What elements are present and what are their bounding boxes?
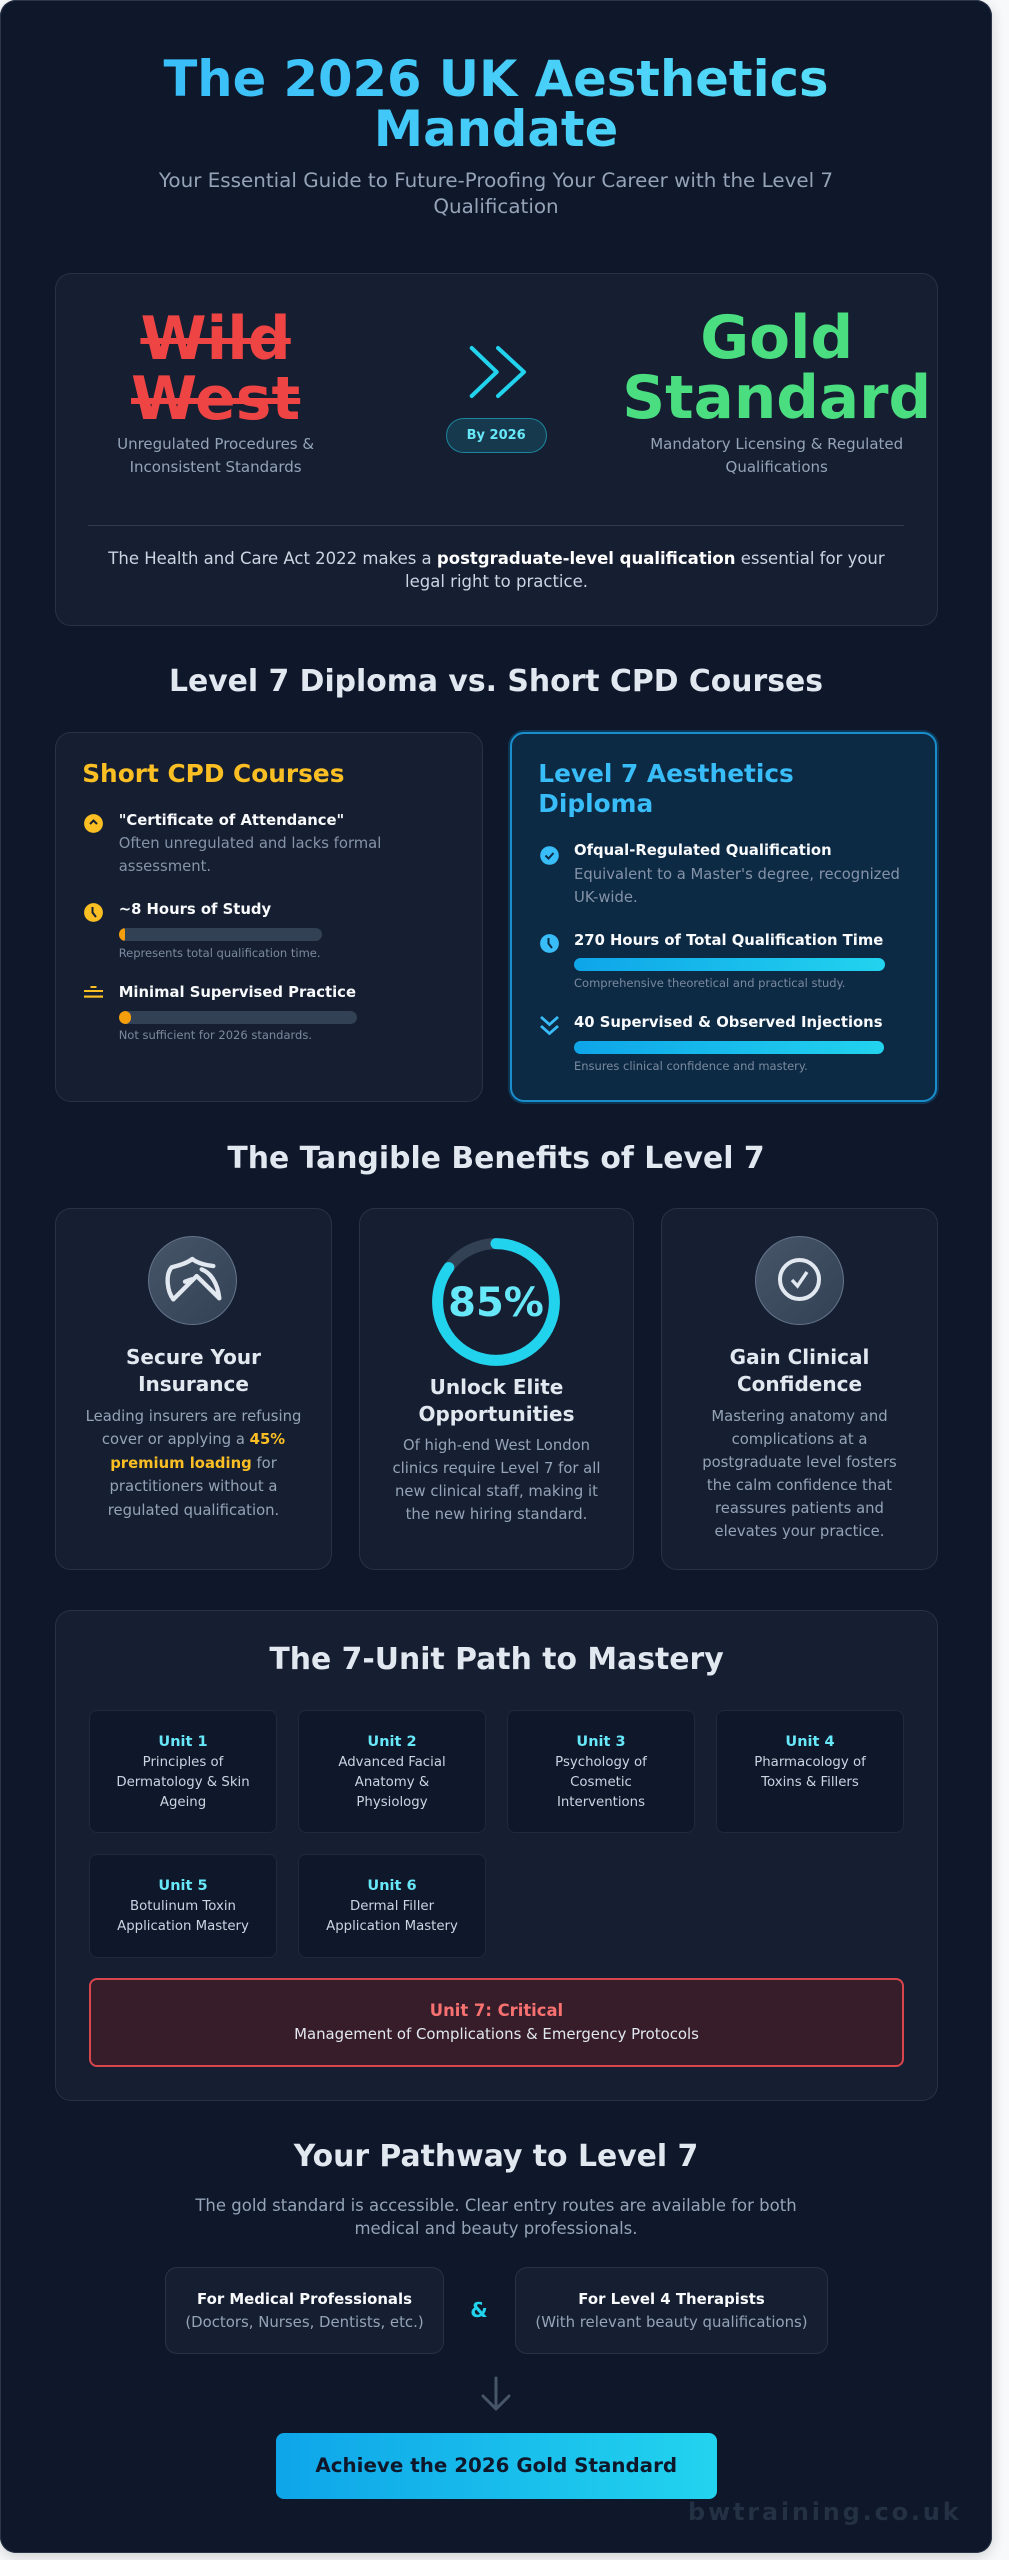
card text: Mastering anatomy and — [711, 1408, 888, 1424]
unit 7 text: Management of Complications & Emergency Protocols — [294, 2025, 699, 2043]
item title: ~8 Hours of Study — [119, 901, 271, 918]
panel: unlock elite opportunities — [359, 1208, 634, 1570]
route text: (With relevant beauty qualifications) — [535, 2312, 808, 2330]
item title: Minimal Supervised Practice — [119, 984, 356, 1000]
heading: benefits: The Tangible Benefits of Level 7 — [227, 1141, 765, 1176]
card title: Confidence — [737, 1372, 862, 1396]
heading: pathway: Your Pathway to Level 7 — [294, 2139, 698, 2174]
card text — [86, 1408, 301, 1518]
text: pathway intro: medical and beauty professionals. — [354, 2219, 638, 2238]
icon: minimal lines — [84, 986, 103, 998]
subtitle — [158, 168, 833, 218]
unit 1: Dermatology & Skin — [116, 1775, 250, 1790]
unit 2: Unit 2 — [367, 1734, 417, 1750]
card text: reassures patients and — [715, 1500, 884, 1517]
card text — [393, 1437, 600, 1523]
unit 6: Unit 6 — [367, 1878, 417, 1894]
route text: (Doctors, Nurses, Dentists, etc.) — [185, 2312, 424, 2330]
bar caption: Ensures clinical confidence and mastery. — [574, 1059, 808, 1073]
heading: gold standard — [622, 304, 931, 433]
panel heading — [538, 759, 794, 818]
unit 5: Unit 5 — [158, 1878, 208, 1894]
card title: Opportunities — [418, 1402, 574, 1426]
text: pathway intro: The gold standard is accessible. Clear entry routes are available for both — [195, 2196, 797, 2215]
card text: new clinical staff, making it — [395, 1483, 598, 1500]
bar: 8 hours — [119, 928, 322, 941]
heading: wild west: Wild — [140, 304, 291, 374]
divider — [88, 525, 904, 526]
watermark: bwtraining.co.uk — [688, 2498, 961, 2526]
title: The 2026 UK Aesthetics — [163, 50, 829, 108]
unit 3: Psychology of — [555, 1755, 647, 1770]
card text: complications at a — [732, 1431, 867, 1448]
bar caption: Not sufficient for 2026 standards. — [119, 1028, 312, 1042]
panel: level 7 diploma — [510, 732, 937, 1102]
unit 4: Unit 4 — [785, 1734, 835, 1750]
button: call to action: Achieve the 2026 Gold Standard — [315, 2454, 677, 2477]
card text: elevates your practice. — [714, 1523, 884, 1540]
unit 2: Anatomy & — [355, 1775, 429, 1790]
heading: gold standard: Gold — [700, 304, 853, 373]
route title: For Level 4 Therapists — [578, 2290, 765, 2308]
item title: 270 Hours of Total Qualification Time — [574, 932, 883, 949]
bar: minimal practice — [119, 1011, 357, 1024]
route title: For Medical Professionals — [197, 2290, 412, 2308]
item text — [119, 835, 381, 875]
panel heading: Short CPD Courses — [82, 758, 344, 788]
icon: chevron circle — [84, 814, 103, 833]
subtitle: Your Essential Guide to Future-Proofing Your Career with the Level 7 — [159, 168, 833, 192]
unit 4 — [716, 1710, 904, 1833]
card text: regulated qualification. — [108, 1502, 279, 1518]
icon: double chevron down — [540, 1016, 559, 1036]
icon: double chevron arrow — [470, 346, 526, 398]
panel: gain clinical confidence — [661, 1208, 938, 1570]
title — [156, 55, 836, 154]
bar: 40 injections — [574, 1041, 884, 1054]
unit 5 — [89, 1854, 277, 1958]
heading: gold standard: Standard — [622, 364, 931, 433]
bar: 270 hours — [574, 958, 885, 971]
card text: Leading insurers are refusing — [86, 1408, 301, 1424]
item title: "Certificate of Attendance" — [119, 812, 344, 829]
unit 4: Pharmacology of — [754, 1755, 866, 1770]
card text: postgraduate level fosters — [702, 1454, 897, 1471]
text: legal statement: The Health and Care Act 2022 makes a postgraduate-level qualification essential for your — [108, 548, 885, 568]
unit 5: Application Mastery — [117, 1919, 249, 1934]
card text: premium loading for — [110, 1454, 277, 1472]
button: call to action — [276, 2433, 717, 2499]
card title — [126, 1344, 261, 1396]
text: mandatory licensing: Mandatory Licensing & Regulated — [650, 435, 903, 453]
chart: 85 percent ring: 85% — [448, 1280, 544, 1326]
unit 2 — [298, 1710, 486, 1833]
unit 7 critical — [89, 1978, 904, 2067]
text: unregulated: Unregulated Procedures & — [117, 435, 314, 453]
ampersand: & — [470, 2298, 488, 2322]
panel: hero wild west to gold standard — [55, 273, 938, 626]
item text — [574, 866, 900, 906]
card text: Of high-end West London — [403, 1437, 590, 1454]
text: mandatory licensing: Qualifications — [726, 458, 828, 476]
item text: UK-wide. — [574, 889, 638, 906]
icon: clock — [540, 934, 559, 953]
unit 3: Interventions — [557, 1795, 645, 1810]
title: Mandate — [374, 100, 618, 158]
card title: Unlock Elite — [430, 1374, 563, 1398]
icon: check badge — [540, 846, 559, 865]
text: unregulated: Inconsistent Standards — [130, 458, 302, 476]
heading: wild west: West — [131, 364, 300, 434]
text: legal statement: legal right to practice. — [405, 572, 588, 590]
heading: comparison: Level 7 Diploma vs. Short CPD Courses — [169, 664, 823, 699]
card text: cover or applying a 45% — [102, 1431, 285, 1448]
panel: short CPD courses — [55, 732, 483, 1102]
card title — [730, 1344, 869, 1396]
panel heading: Level 7 Aesthetics — [538, 759, 794, 788]
unit 1: Unit 1 — [158, 1734, 208, 1750]
panel heading: Diploma — [538, 789, 653, 818]
route: medical professionals — [165, 2267, 444, 2354]
item text: Often unregulated and lacks formal — [119, 835, 381, 852]
unit 6: Dermal Filler — [350, 1899, 434, 1914]
badge: by 2026: By 2026 — [467, 428, 526, 443]
unit 1: Ageing — [160, 1795, 206, 1810]
subtitle: Qualification — [433, 195, 559, 218]
text: pathway intro — [195, 2196, 797, 2238]
unit 5: Botulinum Toxin — [130, 1899, 236, 1914]
card text: clinics require Level 7 for all — [393, 1460, 600, 1477]
unit 2: Physiology — [356, 1795, 428, 1810]
icon: check in circle — [755, 1236, 844, 1324]
unit 7 title: Unit 7: Critical — [430, 2001, 563, 2020]
unit 3: Unit 3 — [576, 1734, 626, 1750]
arrow: down — [482, 2376, 510, 2410]
panel heading: The 7-Unit Path to Mastery — [269, 1642, 724, 1677]
unit 2: Advanced Facial — [338, 1755, 446, 1770]
badge: by 2026 — [446, 418, 547, 453]
chart: 85 percent ring — [432, 1238, 560, 1366]
heading: wild west — [131, 304, 300, 434]
item title: 40 Supervised & Observed Injections — [574, 1014, 883, 1031]
bar caption: Comprehensive theoretical and practical study. — [574, 976, 845, 990]
unit 4: Toxins & Fillers — [761, 1775, 859, 1790]
card title — [418, 1374, 574, 1426]
unit 6: Application Mastery — [326, 1919, 458, 1934]
unit 6 — [298, 1854, 486, 1958]
item title: Ofqual-Regulated Qualification — [574, 842, 832, 859]
route: level 4 therapists — [515, 2267, 828, 2354]
panel: secure your insurance — [55, 1208, 332, 1570]
card text: the calm confidence that — [707, 1477, 892, 1494]
item text: assessment. — [119, 858, 211, 875]
card text: practitioners without a — [110, 1478, 277, 1495]
text: unregulated — [117, 435, 314, 476]
unit 3 — [507, 1710, 695, 1833]
card title: Insurance — [138, 1372, 249, 1396]
item text: Equivalent to a Master's degree, recognized — [574, 866, 900, 883]
text: mandatory licensing — [650, 435, 903, 476]
unit 1 — [89, 1710, 277, 1833]
bar caption: Represents total qualification time. — [119, 946, 321, 960]
card text: the new hiring standard. — [406, 1506, 587, 1523]
unit 1: Principles of — [143, 1755, 223, 1770]
icon: clock — [84, 903, 103, 922]
unit 3: Cosmetic — [570, 1775, 632, 1790]
icon: handshake in circle — [148, 1236, 237, 1324]
text: legal statement — [108, 548, 885, 590]
panel: 7-unit path — [55, 1610, 938, 2101]
card text — [702, 1408, 897, 1540]
card title: Gain Clinical — [730, 1344, 869, 1368]
card title: Secure Your — [126, 1344, 261, 1368]
